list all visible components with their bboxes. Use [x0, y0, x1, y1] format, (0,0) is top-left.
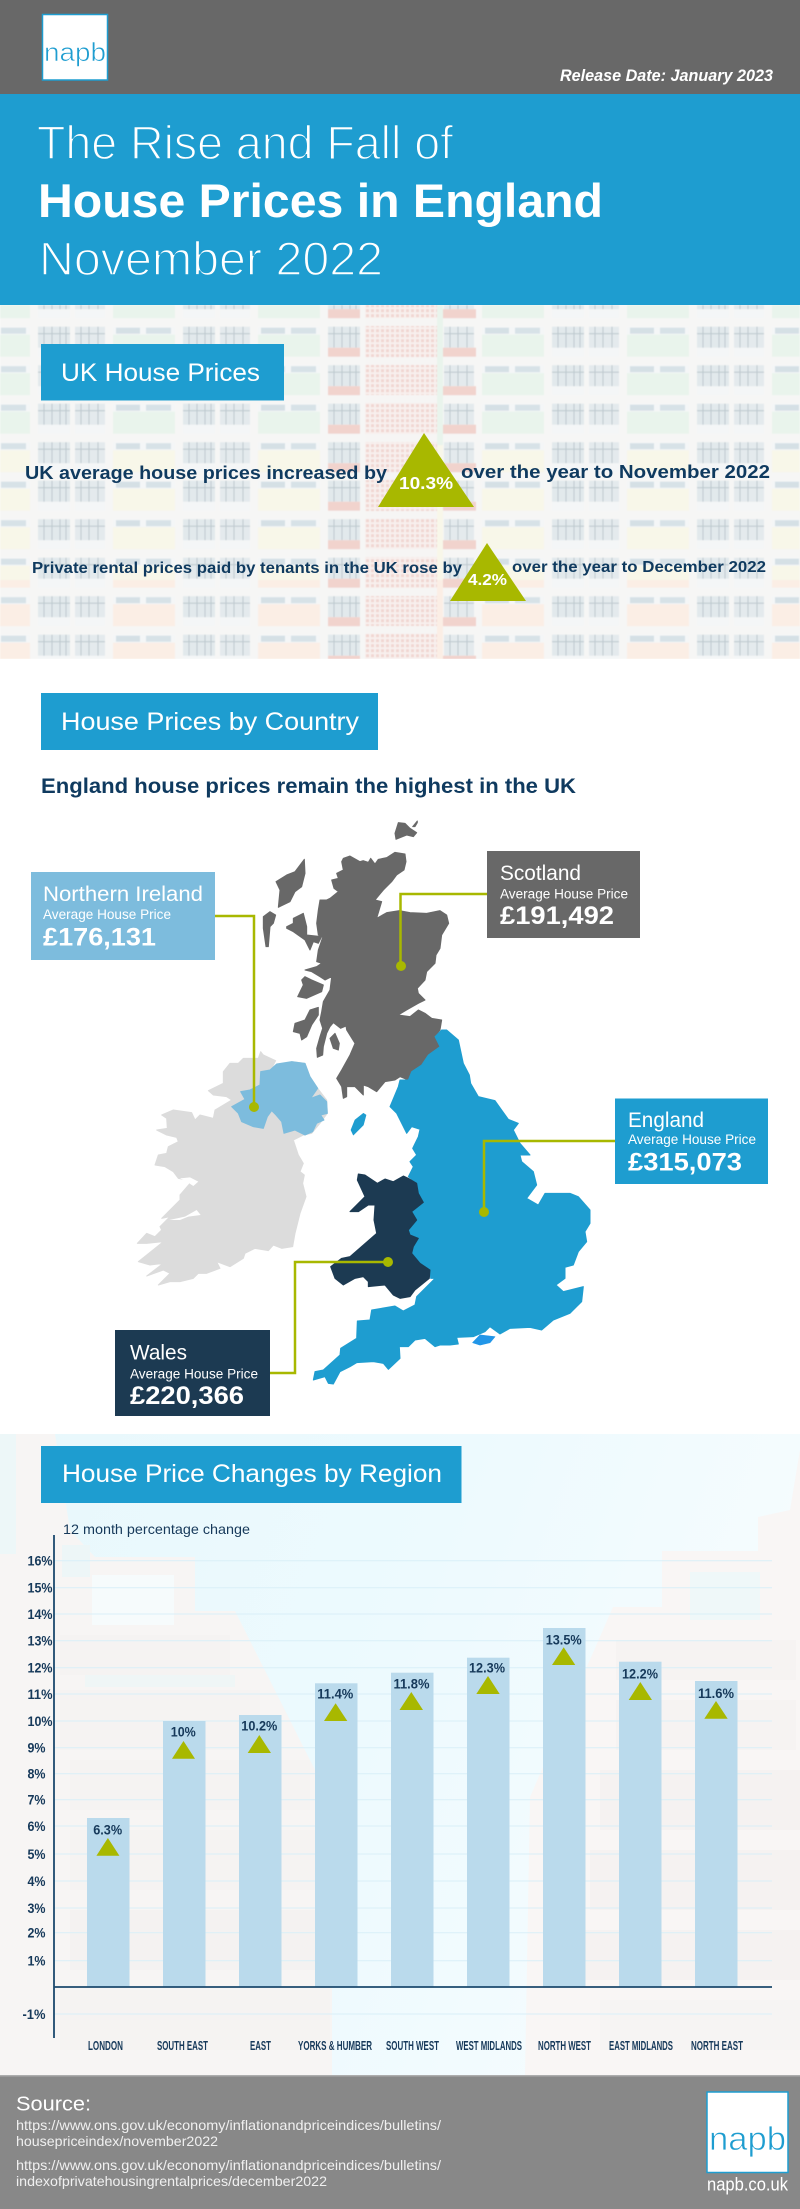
website: napb.co.uk — [707, 2175, 789, 2195]
heading: House Prices by Country — [41, 693, 378, 750]
connector: Wales — [270, 1257, 393, 1373]
title panel — [0, 94, 800, 305]
callout: Scotland: £191,492 — [500, 902, 614, 930]
y axis labels: 7% — [28, 1792, 46, 1808]
callout: Northern Ireland: Average House Price — [43, 907, 171, 922]
callout: Scotland: Average House Price — [500, 886, 628, 902]
icon: up triangle 4.2% — [450, 543, 526, 601]
background: tower block photo — [0, 305, 800, 659]
stat: average house prices: over the year to November 2022 — [461, 461, 770, 482]
bar: East Midlands: 12.2% — [622, 1666, 658, 1682]
bar: London: 6.3% — [93, 1822, 122, 1838]
bar: North East — [695, 1681, 738, 1987]
y axis labels: 14% — [28, 1607, 52, 1622]
callout: Scotland: Scotland — [500, 862, 581, 885]
callout: Wales: Average House Price — [130, 1366, 258, 1382]
y axis labels: 3% — [28, 1901, 46, 1916]
panel: house price changes by region — [0, 1434, 800, 2076]
bar: East: 10.2% — [241, 1718, 277, 1734]
title line 2: House Prices in England — [38, 174, 603, 227]
title line 3: November 2022 — [39, 232, 383, 285]
chart axis title: 12 month percentage change — [63, 1522, 250, 1537]
map: England — [313, 1030, 590, 1384]
icon: up triangle 4.2%: 4.2% — [468, 572, 507, 589]
chart: 12 month percentage change — [22, 1522, 772, 2053]
y axis labels: 2% — [28, 1926, 46, 1940]
stat: average house prices: UK average house prices increased by — [25, 462, 388, 483]
connector: Northern Ireland — [215, 916, 259, 1112]
x axis labels: SOUTH WEST — [386, 2039, 439, 2053]
logo: napb footer: napb — [709, 2120, 786, 2157]
connector: Scotland — [396, 894, 487, 971]
x axis labels: WEST MIDLANDS — [456, 2039, 522, 2053]
callout: Scotland — [396, 851, 640, 971]
release date: Release Date: January 2023 — [560, 67, 773, 85]
y axis labels: 10% — [28, 1714, 52, 1729]
icon: up triangle 10.3%: 10.3% — [399, 473, 453, 493]
callout: England: England — [628, 1109, 704, 1132]
source heading: Source: — [16, 2093, 91, 2116]
callout: Wales: Wales — [130, 1342, 187, 1364]
y axis labels: 6% — [28, 1819, 46, 1834]
y axis labels: 15% — [28, 1580, 52, 1596]
stat: rental prices: over the year to December 2022 — [512, 559, 766, 576]
callout: Northern Ireland — [31, 872, 259, 1112]
bar: South West: 11.8% — [394, 1676, 430, 1692]
y axis labels: 16% — [28, 1554, 52, 1568]
heading: House Price Changes by Region: House Price Changes by Region — [62, 1460, 442, 1488]
x axis labels — [88, 2039, 743, 2053]
bar: North East: 11.6% — [698, 1686, 734, 1701]
callout: Wales: £220,366 — [130, 1382, 244, 1410]
y axis labels: 1% — [28, 1954, 46, 1968]
bar: East — [239, 1715, 282, 1987]
callout: Northern Ireland: £176,131 — [43, 924, 156, 952]
icon: up triangle 10.3% — [378, 433, 474, 507]
map: Ireland — [137, 1052, 327, 1285]
callout: Northern Ireland: Northern Ireland — [43, 883, 203, 906]
y axis labels: 5% — [28, 1847, 46, 1862]
map of UK and Ireland — [137, 821, 590, 1384]
source links: indexofprivatehousingrentalprices/december2022 — [16, 2173, 327, 2189]
bar: South East: 10% — [171, 1724, 196, 1740]
source links: https://www.ons.gov.uk/economy/inflationandpriceindices/bulletins/ — [16, 2117, 441, 2133]
callout: Wales — [115, 1257, 393, 1416]
heading: House Price Changes by Region — [41, 1446, 462, 1503]
heading: House Prices by Country: House Prices by Country — [61, 708, 360, 736]
y axis labels: 8% — [28, 1766, 46, 1782]
bar: London — [87, 1818, 130, 1987]
background: apartment building photo — [0, 1434, 800, 2076]
bar: East Midlands — [619, 1662, 662, 1987]
logo: napb — [42, 14, 108, 80]
bar: West Midlands — [467, 1658, 510, 1987]
x axis labels: NORTH EAST — [691, 2039, 743, 2053]
x axis labels: EAST — [250, 2039, 271, 2053]
bar: Yorks & Humber: 11.4% — [317, 1686, 353, 1702]
subheading: England house prices remain the highest in the UK — [41, 775, 576, 798]
callout: England: £315,073 — [628, 1148, 742, 1176]
stat: average house prices — [25, 433, 770, 507]
heading: UK House Prices: UK House Prices — [61, 359, 260, 387]
x axis labels: YORKS & HUMBER — [298, 2039, 372, 2053]
bar: South West — [391, 1673, 434, 1987]
x axis labels: EAST MIDLANDS — [609, 2039, 673, 2053]
footer — [0, 2075, 800, 2209]
x axis labels: NORTH WEST — [538, 2039, 591, 2053]
title line 1: The Rise and Fall of — [37, 116, 454, 169]
panel: house prices by country — [31, 693, 768, 1416]
bar: West Midlands: 12.3% — [469, 1660, 505, 1676]
axes — [54, 1535, 772, 2038]
panel: UK house prices — [0, 305, 800, 659]
y axis labels: 9% — [28, 1740, 46, 1756]
heading: UK House Prices — [41, 344, 284, 400]
logo: napb: napb — [44, 37, 106, 67]
y axis labels: 13% — [28, 1634, 52, 1648]
callout: England: Average House Price — [628, 1132, 756, 1147]
x axis labels: SOUTH EAST — [157, 2039, 208, 2053]
header bar — [0, 0, 800, 94]
y axis labels: 12% — [28, 1660, 52, 1676]
y axis labels: 4% — [28, 1874, 46, 1889]
map: Scotland — [263, 821, 449, 1098]
source links: https://www.ons.gov.uk/economy/inflationandpriceindices/bulletins/ — [16, 2157, 441, 2173]
map: Northern Ireland — [232, 1062, 327, 1135]
callout: England — [479, 1098, 768, 1217]
y axis labels — [22, 1554, 52, 2022]
connector: England — [479, 1141, 615, 1217]
y axis labels: -1% — [22, 2007, 46, 2022]
x axis labels: LONDON — [88, 2039, 123, 2053]
bar: North West: 13.5% — [546, 1632, 582, 1648]
stat: rental prices: Private rental prices paid by tenants in the UK rose by — [32, 560, 462, 577]
bar: Yorks & Humber — [315, 1683, 358, 1987]
stat: rental prices — [32, 543, 766, 601]
y axis labels: 11% — [28, 1687, 52, 1702]
source links — [16, 2117, 441, 2189]
bar: South East — [163, 1721, 206, 1987]
map: Wales — [331, 1174, 430, 1298]
bar: North West — [543, 1628, 586, 1987]
source links: housepriceindex/november2022 — [16, 2133, 218, 2149]
logo: napb footer — [707, 2092, 788, 2172]
